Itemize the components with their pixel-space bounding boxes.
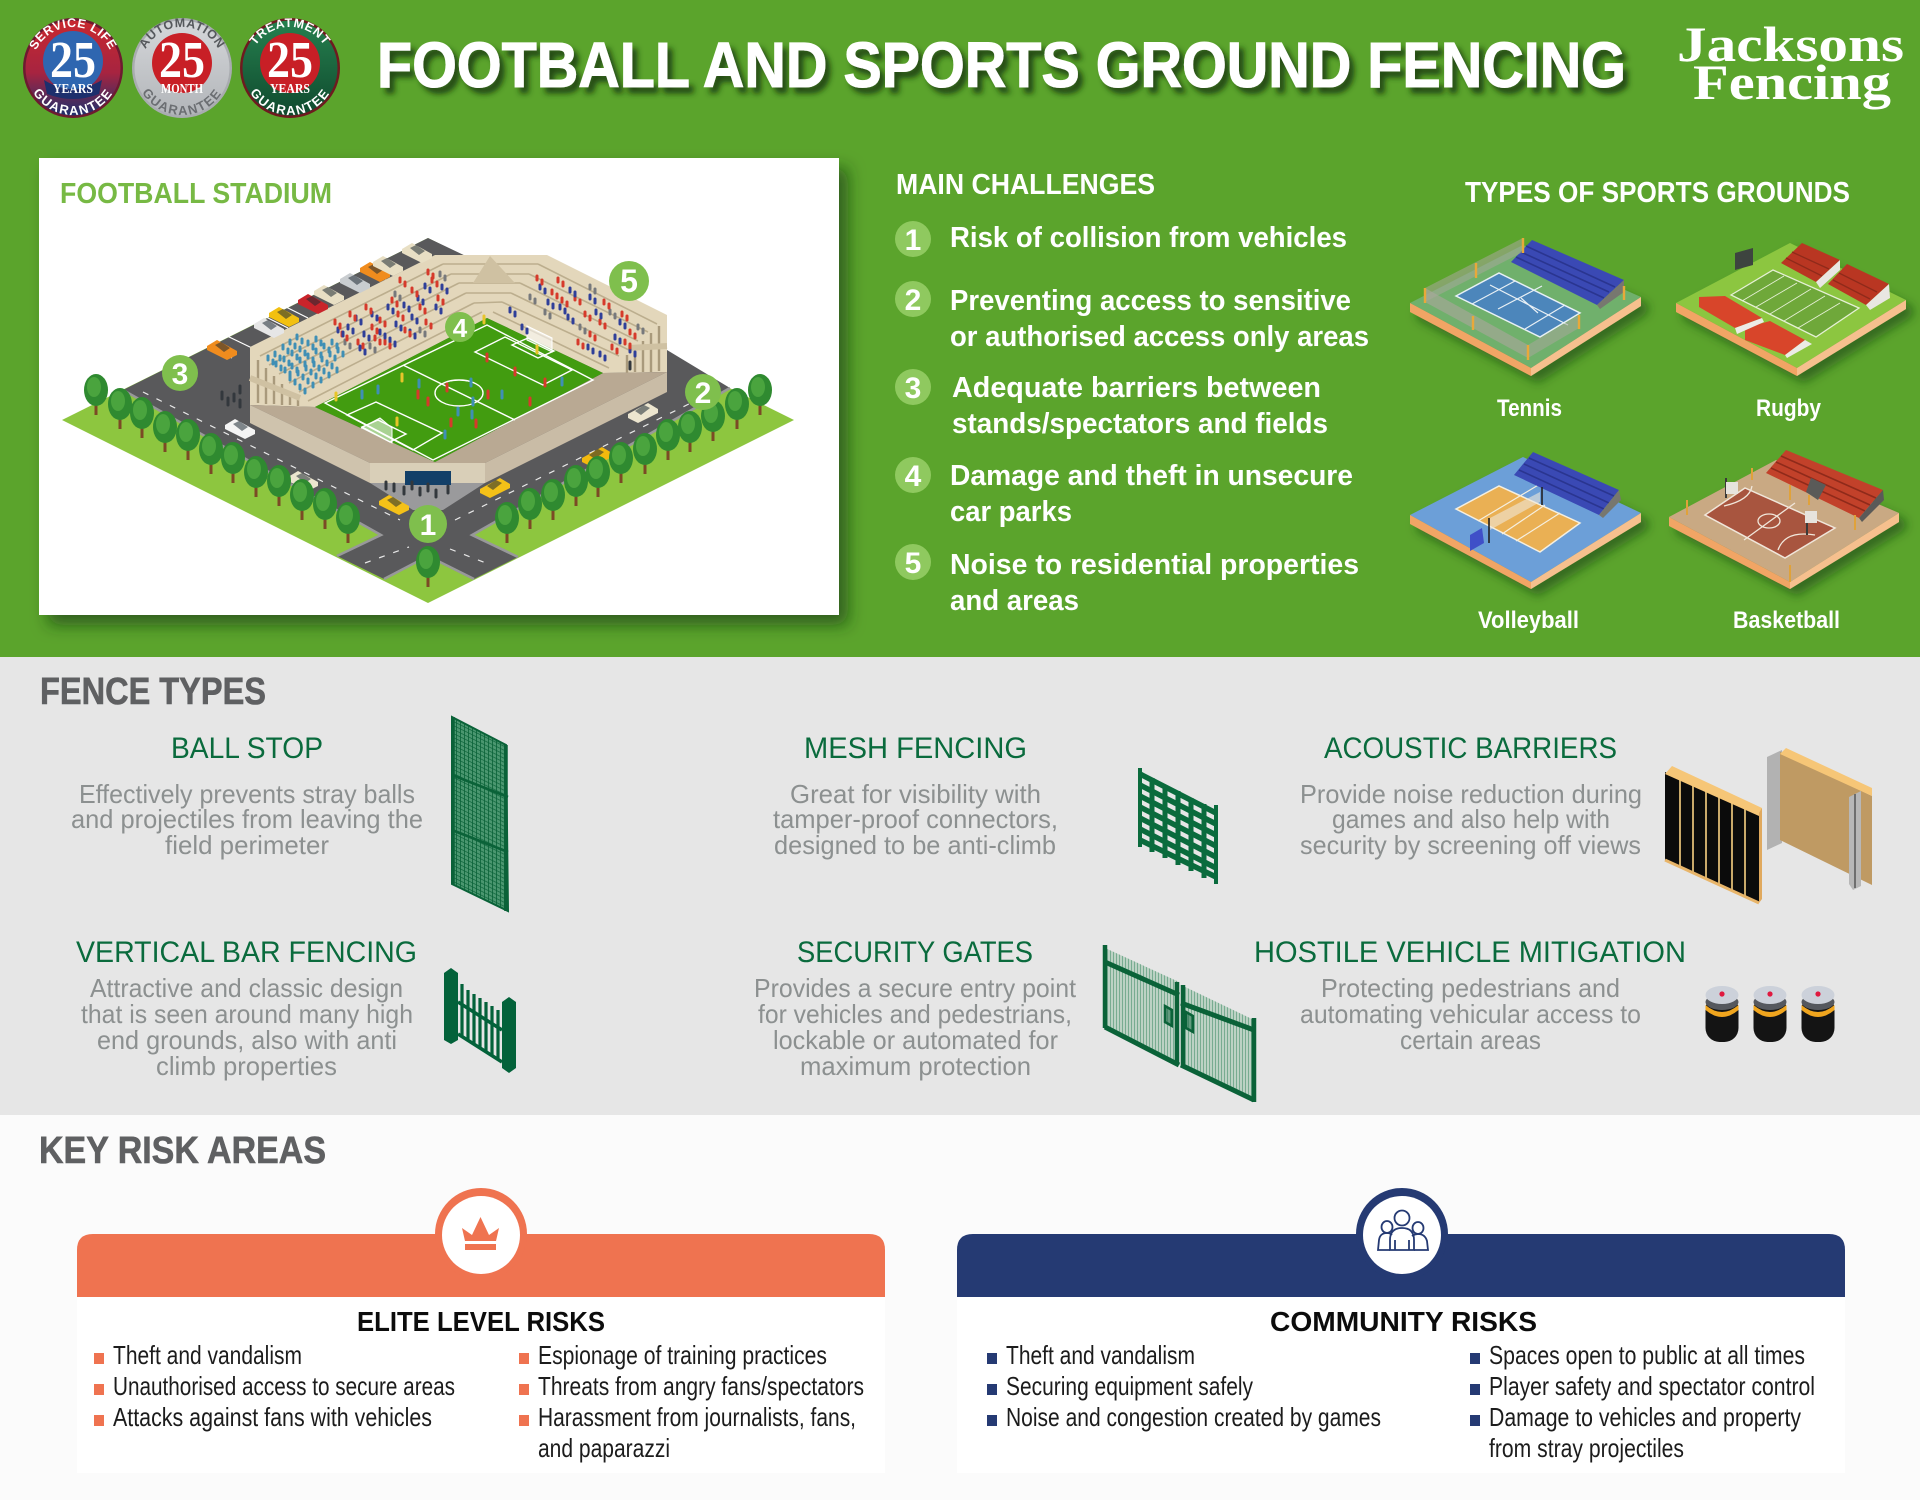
- heading: main challenges: MAIN CHALLENGES: [896, 169, 1155, 201]
- challenge 3: 3: [905, 372, 921, 405]
- badge: service life guarantee: GUARANTEE: [34, 89, 112, 116]
- background: green header panel: [0, 0, 1920, 657]
- challenge 2: Preventing access to sensitive: [950, 285, 1351, 317]
- description: security gates: for vehicles and pedestrians,: [758, 999, 1072, 1029]
- list: elite risks left: Unauthorised access to secure areas: [113, 1371, 455, 1401]
- panel: football stadium card: [39, 158, 839, 615]
- icon: vertical bar fence: [444, 968, 516, 1073]
- football pitch: [315, 318, 603, 462]
- list: elite risks right: Threats from angry fans/spectators: [538, 1371, 864, 1401]
- sports ground: basketball: [1669, 450, 1899, 589]
- heading: acoustic barriers: ACOUSTIC BARRIERS: [1324, 732, 1617, 765]
- badge: treatment guarantee: TREATMENT: [248, 18, 331, 44]
- challenge 3: Adequate barriers between: [952, 372, 1321, 404]
- icon: ball stop fence: [452, 717, 508, 911]
- description: security gates: Provides a secure entry point: [754, 973, 1077, 1003]
- icon: mesh fence: [1140, 768, 1216, 884]
- description: mesh fencing: [773, 779, 1058, 860]
- challenge 2: 2: [905, 284, 921, 317]
- list: community risks right: [1470, 1340, 1815, 1463]
- challenge 3: [895, 369, 1328, 440]
- panel: community risks: [957, 1188, 1845, 1473]
- challenge 5: Noise to residential properties: [950, 549, 1359, 581]
- map marker 4: 4: [453, 313, 468, 343]
- challenge 2: or authorised access only areas: [950, 321, 1369, 353]
- badge: automation guarantee: 25: [159, 32, 205, 89]
- panel header bar: [957, 1234, 1845, 1297]
- badge: service life guarantee: 25: [50, 32, 96, 89]
- heading: key risk areas: KEY RISK AREAS: [39, 1130, 326, 1172]
- badge: service life guarantee: SERVICE LIFE: [30, 18, 117, 50]
- heading: elite level risks: ELITE LEVEL RISKS: [357, 1306, 605, 1337]
- ground: [62, 238, 794, 603]
- fence type: acoustic barriers: [1300, 732, 1872, 903]
- list: community risks left: Theft and vandalism: [1006, 1340, 1195, 1370]
- description: hostile vehicle mitigation: Protecting pedestrians and: [1321, 973, 1620, 1003]
- challenge 3: stands/spectators and fields: [952, 408, 1328, 440]
- badge: treatment guarantee: [240, 18, 340, 118]
- list: elite risks right: [519, 1340, 864, 1463]
- fence type: vertical bar fencing: [76, 936, 516, 1081]
- heading: types of sports grounds: TYPES OF SPORTS GROUNDS: [1465, 177, 1850, 209]
- heading: ball stop: BALL STOP: [171, 732, 323, 765]
- description: acoustic barriers: games and also help with: [1332, 804, 1610, 834]
- heading: fence types: FENCE TYPES: [40, 671, 266, 713]
- map marker 1: [409, 505, 447, 543]
- map marker 5: 5: [620, 263, 638, 299]
- list: elite risks right: Harassment from journalists, fans,: [538, 1402, 856, 1432]
- description: security gates: maximum protection: [800, 1051, 1031, 1081]
- challenge 4: Damage and theft in unsecure: [950, 460, 1353, 492]
- challenge 2: [895, 281, 1369, 353]
- list: elite risks right: and paparazzi: [538, 1433, 670, 1463]
- description: acoustic barriers: security by screening off views: [1300, 830, 1641, 860]
- list: community risks right: Player safety and spectator control: [1489, 1371, 1815, 1401]
- description: hostile vehicle mitigation: certain areas: [1400, 1025, 1541, 1055]
- list: elite risks left: Attacks against fans with vehicles: [113, 1402, 432, 1432]
- roads and car park: [123, 238, 730, 579]
- badge: service life guarantee: [23, 18, 123, 118]
- list: community risks left: Noise and congestion created by games: [1006, 1402, 1381, 1432]
- fence type: hostile vehicle mitigation: [1254, 936, 1834, 1055]
- trees: [84, 374, 772, 587]
- challenge 4: [895, 457, 1353, 528]
- badge: treatment guarantee: GUARANTEE: [252, 89, 330, 116]
- list: elite risks right: Espionage of training practices: [538, 1340, 827, 1370]
- map marker 2: 2: [695, 377, 711, 410]
- description: mesh fencing: Great for visibility with: [790, 779, 1041, 809]
- map marker 4: [445, 312, 475, 343]
- challenge 4: car parks: [950, 496, 1072, 528]
- description: acoustic barriers: [1300, 779, 1642, 860]
- sports ground: rugby: [1676, 243, 1906, 376]
- description: hostile vehicle mitigation: [1300, 973, 1641, 1055]
- description: security gates: lockable or automated for: [773, 1025, 1058, 1055]
- heading: security gates: SECURITY GATES: [797, 936, 1033, 969]
- heading: football stadium: FOOTBALL STADIUM: [60, 178, 332, 210]
- fence type: security gates: [754, 936, 1254, 1102]
- stadium outer wall and entrance: [250, 372, 667, 485]
- description: mesh fencing: designed to be anti-climb: [774, 830, 1056, 860]
- map marker 3: [162, 355, 198, 391]
- map marker 3: 3: [172, 358, 188, 391]
- map marker 2: [685, 374, 721, 410]
- main challenges list: [895, 169, 1369, 617]
- cars: [207, 243, 658, 515]
- challenge 5: [895, 544, 1359, 617]
- heading: community risks: COMMUNITY RISKS: [1270, 1306, 1537, 1337]
- background: key risk areas panel: [0, 1115, 1920, 1500]
- sports ground: tennis: [1410, 238, 1641, 376]
- challenge 1: Risk of collision from vehicles: [950, 222, 1347, 254]
- logo: Jacksons Fencing: [1677, 16, 1904, 110]
- players on pitch: [336, 316, 562, 438]
- challenge 1: 1: [905, 224, 921, 257]
- icon: security gate: [1105, 945, 1254, 1102]
- badge: service life guarantee: YEARS: [53, 82, 93, 97]
- list: elite risks left: Theft and vandalism: [113, 1340, 302, 1370]
- badge: treatment guarantee: YEARS: [270, 82, 310, 97]
- spectators: [222, 270, 643, 497]
- map marker 1: 1: [420, 509, 436, 542]
- description: ball stop: [71, 779, 423, 860]
- description: vertical bar fencing: climb properties: [156, 1051, 337, 1081]
- panel header bar: [77, 1234, 885, 1297]
- description: vertical bar fencing: end grounds, also with anti: [97, 1025, 397, 1055]
- description: mesh fencing: tamper-proof connectors,: [773, 804, 1058, 834]
- heading: hostile vehicle mitigation: HOSTILE VEHICLE MITIGATION: [1254, 936, 1686, 969]
- label: basketball: Basketball: [1733, 607, 1840, 634]
- panel: elite level risks: [77, 1188, 885, 1473]
- description: vertical bar fencing: that is seen around many high: [81, 999, 413, 1029]
- heading: vertical bar fencing: VERTICAL BAR FENCING: [76, 936, 417, 969]
- description: security gates: [754, 973, 1077, 1081]
- heading: mesh fencing: MESH FENCING: [804, 732, 1027, 765]
- panel body: [957, 1290, 1845, 1473]
- challenge 5: 5: [905, 547, 921, 580]
- label: volleyball: Volleyball: [1478, 607, 1579, 634]
- icon: people: [1356, 1188, 1448, 1280]
- list: community risks left: Securing equipment safely: [1006, 1371, 1253, 1401]
- background: fence types panel: [0, 657, 1920, 1115]
- badge: automation guarantee: [132, 18, 232, 118]
- description: ball stop: Effectively prevents stray balls: [79, 779, 415, 809]
- logo: Jacksons Fencing: Fencing: [1693, 54, 1891, 110]
- badge: treatment guarantee: 25: [267, 32, 313, 89]
- badge: automation guarantee: GUARANTEE: [144, 89, 221, 116]
- list: community risks right: from stray projectiles: [1489, 1433, 1684, 1463]
- icon: acoustic barrier panels: [1665, 748, 1872, 903]
- description: acoustic barriers: Provide noise reduction during: [1300, 779, 1642, 809]
- badge: automation guarantee: AUTOMATION: [140, 18, 225, 49]
- fence type: ball stop: [71, 717, 508, 911]
- stadium stands: [250, 255, 667, 407]
- description: ball stop: and projectiles from leaving the: [71, 804, 423, 834]
- sports ground: volleyball: [1410, 452, 1641, 589]
- guarantee badges: [23, 18, 340, 118]
- logo: Jacksons Fencing: Jacksons: [1677, 16, 1904, 72]
- challenge 4: 4: [905, 460, 922, 493]
- icon: bollards: [1706, 986, 1834, 1042]
- label: rugby: Rugby: [1756, 395, 1822, 422]
- fence type: mesh fencing: [773, 732, 1216, 884]
- badge: automation guarantee: MONTH: [161, 82, 203, 97]
- card background: [39, 158, 839, 615]
- map marker 5: [609, 261, 649, 301]
- list: community risks right: Spaces open to public at all times: [1489, 1340, 1805, 1370]
- description: ball stop: field perimeter: [165, 830, 329, 860]
- description: vertical bar fencing: [81, 973, 413, 1081]
- list: elite risks left: [94, 1340, 455, 1432]
- description: hostile vehicle mitigation: automating vehicular access to: [1300, 999, 1641, 1029]
- icon: crown: [435, 1188, 527, 1280]
- title: FOOTBALL AND SPORTS GROUND FENCING: [377, 29, 1626, 101]
- list: community risks left: [987, 1340, 1381, 1432]
- list: community risks right: Damage to vehicles and property: [1489, 1402, 1801, 1432]
- challenge 5: and areas: [950, 585, 1079, 617]
- label: tennis: Tennis: [1497, 395, 1562, 422]
- description: vertical bar fencing: Attractive and classic design: [90, 973, 403, 1003]
- panel body: [77, 1290, 885, 1473]
